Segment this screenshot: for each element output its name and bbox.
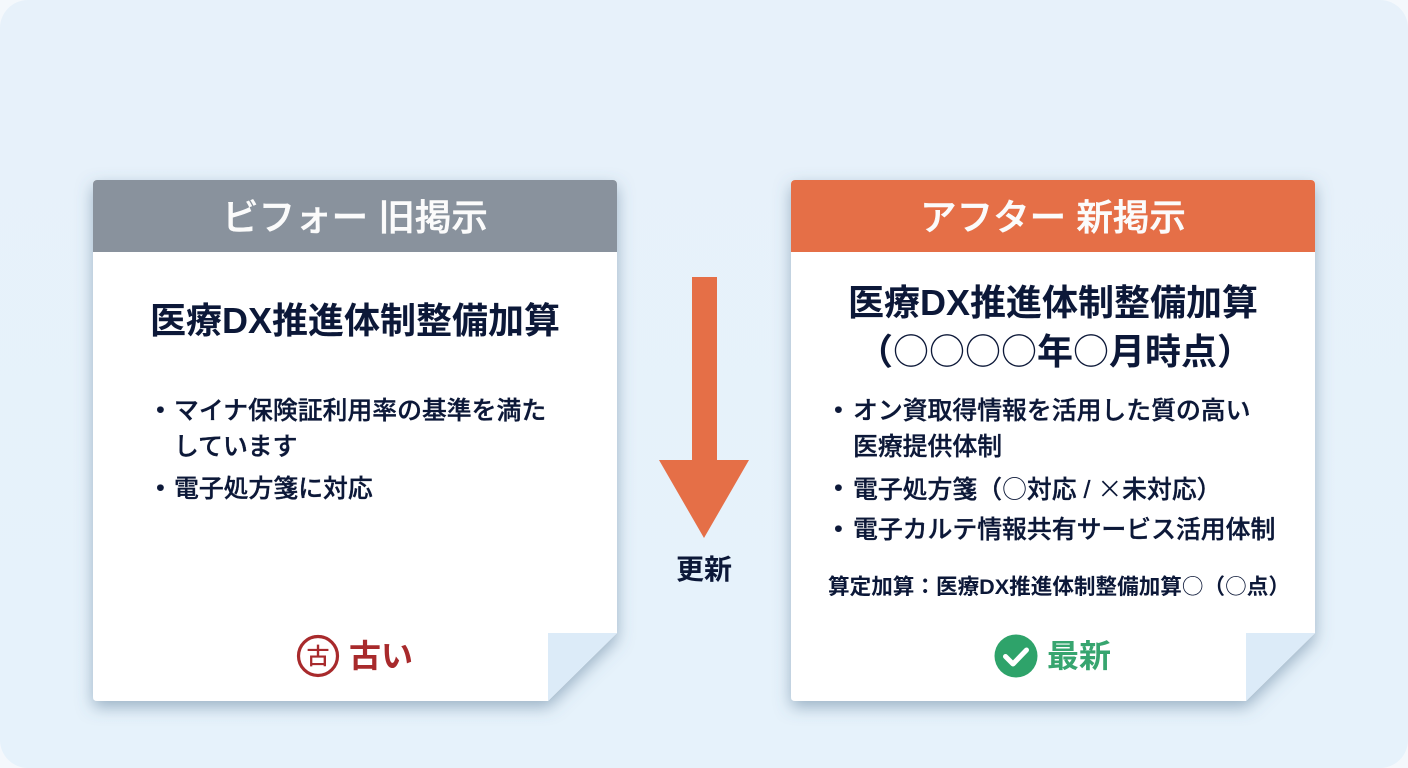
card title with date: 医療DX推進体制整備加算	[848, 282, 1258, 323]
bullet 2 text: 電子処方箋に対応	[174, 476, 373, 503]
icon: old stamp: 古	[306, 643, 330, 669]
bullet 2 text: 電子処方箋（○対応 / ×未対応）	[853, 470, 1222, 506]
bullet list: old items	[148, 397, 546, 503]
bullet 1 text: オン資取得情報を活用した質の高い	[853, 398, 1250, 425]
arrow: update	[659, 277, 749, 538]
bullet 1 text: マイナ保険証利用率の基準を満た	[174, 398, 546, 425]
bullet 3: ・	[826, 517, 851, 544]
bullet 2: ・	[826, 476, 851, 503]
arrow label: 更新	[676, 554, 732, 585]
card title with date	[848, 282, 1258, 375]
bullet 3 text: 電子カルテ情報共有サービス活用体制	[853, 517, 1275, 544]
bullet 1: ・	[148, 398, 173, 425]
calculation note: 算定加算：医療DX推進体制整備加算○（○点）	[828, 570, 1290, 601]
status: latest	[994, 634, 1111, 678]
card title: 医療DX推進体制整備加算	[150, 300, 560, 341]
icon: green check	[994, 634, 1038, 678]
heading: before	[93, 180, 617, 252]
panel: before card	[83, 176, 627, 716]
bullet 1: ・	[826, 398, 851, 425]
bullet 1 continuation: 医療提供体制	[853, 434, 1002, 461]
heading: after: アフター 新掲示	[920, 197, 1186, 238]
status label: old: 古い	[349, 638, 413, 674]
card paper with folded corner	[83, 176, 627, 716]
status: old	[296, 634, 413, 678]
panel: after card	[781, 176, 1325, 716]
bullet 2: ・	[148, 476, 173, 503]
heading: after	[791, 180, 1315, 252]
card paper with folded corner	[781, 176, 1325, 716]
bullet 1 continuation: しています	[174, 434, 297, 461]
status label: latest: 最新	[1047, 638, 1111, 674]
icon: old stamp	[296, 634, 340, 678]
heading: before: ビフォー 旧掲示	[222, 197, 488, 238]
card title with date: （○○○○年○月時点）	[857, 323, 1253, 375]
bullet list: new items	[826, 397, 1275, 544]
